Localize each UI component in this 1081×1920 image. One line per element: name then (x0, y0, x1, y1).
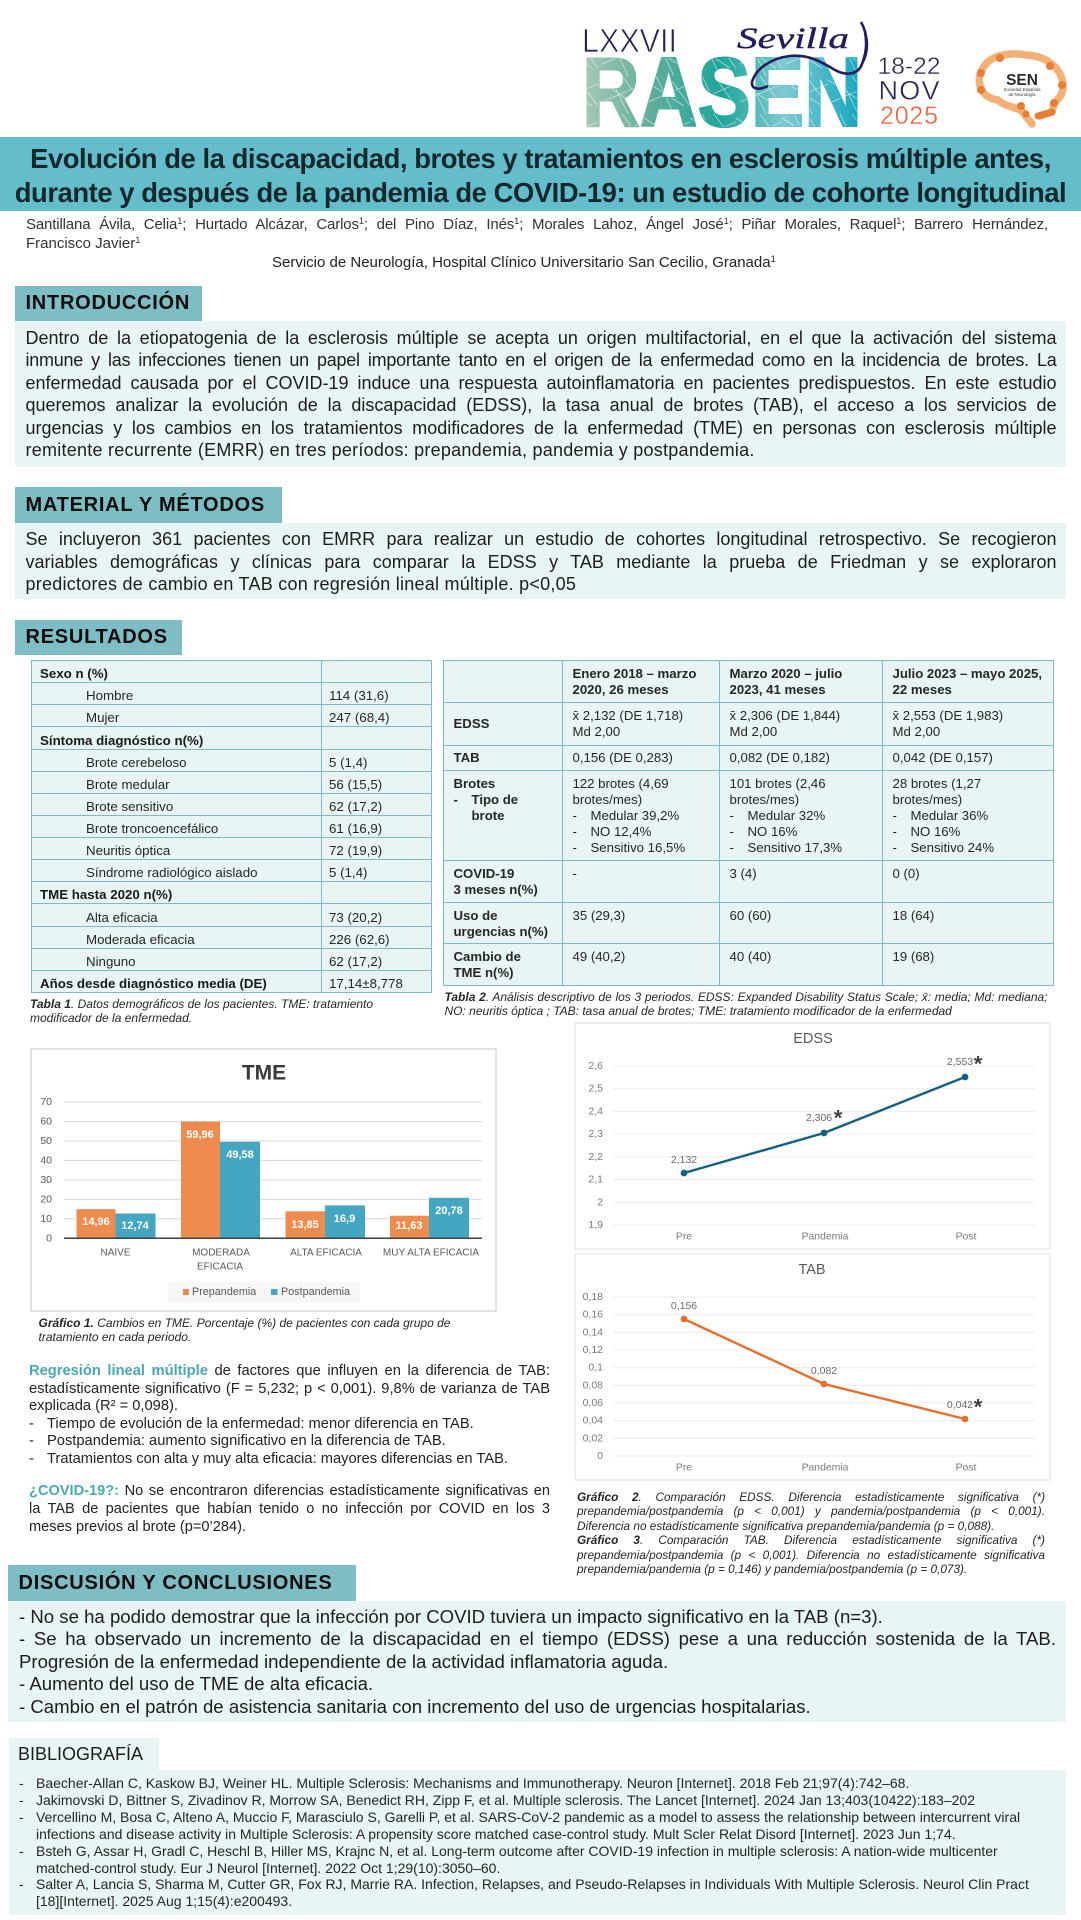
line chart: TAB: Pre (676, 1462, 692, 1474)
text: introducción: remitente recurrente (EMRR) en tres períodos: prepandemia, pandemia y postpandemia. (26, 440, 755, 460)
table 1: datos demográficos: 73 (20,2) (329, 910, 382, 924)
table 2: análisis descriptivo de los 3 periodos: 18 (64) (892, 908, 934, 923)
text: material y métodos: variables demográficas y clínicas para comparar la EDSS y TAB mediante la prueba de Friedman y se exploraron (26, 552, 1056, 572)
text: referencias: Baecher-Allan C, Kaskow BJ, Weiner HL. Multiple Sclerosis: Mechanisms and Immunotherapy. Neuron [Internet]. 2018 Feb 21;97(4):742–68. (36, 1775, 909, 1791)
line chart: EDSS: Pre (676, 1232, 692, 1242)
bar chart: TME: EFICACIA (197, 1262, 243, 1272)
table 1: datos demográficos: Alta eficacia (86, 910, 158, 924)
line chart: EDSS: 2,6 (588, 1060, 603, 1072)
line chart: TAB: 0,156 (671, 1300, 697, 1312)
bar chart: TME: 10 (40, 1213, 52, 1225)
table 2: análisis descriptivo de los 3 periodos (443, 660, 1054, 986)
table 2: análisis descriptivo de los 3 periodos: Cambio de (454, 949, 521, 964)
caption: gráficos 2 y 3: Gráfico 3. Comparación TAB. Diferencia estadísticamente significativa (*) (577, 1533, 1045, 1547)
logo: LXXVII RASEN Sevilla congress: Sevilla (737, 22, 849, 55)
text: referencias: matched-control study. Eur J Neurol [Internet]. 2022 Oct 1;29(10):3050–60. (36, 1860, 500, 1876)
table 1: datos demográficos: Brote sensitivo (86, 799, 173, 814)
table 1: datos demográficos (31, 660, 432, 993)
text: referencias: - (19, 1876, 24, 1892)
line chart: TAB: 0,082 (811, 1365, 837, 1377)
heading: introducción: INTRODUCCIÓN (26, 292, 190, 314)
line chart: EDSS: 2,5 (588, 1083, 603, 1095)
bar chart: TME: 0 (46, 1232, 52, 1244)
table 2: análisis descriptivo de los 3 periodos: Uso de (454, 908, 497, 923)
text: ¿COVID-19? (29, 1483, 550, 1535)
caption: tabla 2: Tabla 2. Análisis descriptivo de los 3 periodos. EDSS: Expanded Disability Status Scale; x̄: media; Md: mediana; (444, 990, 1048, 1004)
bar chart: TME: 13,85 (291, 1219, 319, 1231)
caption: gráfico 1 (38, 1316, 450, 1344)
table 1: datos demográficos: 56 (15,5) (329, 777, 382, 792)
table 2: análisis descriptivo de los 3 periodos: Md 2,00 (572, 724, 620, 739)
table 2: análisis descriptivo de los 3 periodos: NO 16% (910, 824, 960, 839)
text: referencias: infections and disease activity in Multiple Sclerosis: A propensity score matched case-control study. Mult Scler Relat Disord [Internet]. 2023 Jun 1;74. (36, 1826, 956, 1842)
heading: resultados: RESULTADOS (26, 626, 168, 648)
text: regresión lineal múltiple: explicada (R² = 0,098). (29, 1398, 178, 1414)
table 1: datos demográficos: 5 (1,4) (329, 865, 367, 880)
table 2: análisis descriptivo de los 3 periodos: Sensitivo 24% (910, 840, 994, 855)
table 1: datos demográficos: Ninguno (86, 954, 136, 969)
caption: gráficos 2 y 3: Diferencia no estadísticamente significativa prepandemia/pandemia (p = 0,088). (577, 1519, 994, 1533)
table 2: análisis descriptivo de los 3 periodos: 0,156 (DE 0,283) (572, 750, 673, 765)
text: referencias: - (19, 1792, 24, 1808)
text: introducción: enfermedad causada por el COVID-19 induce una respuesta autoinflamatoria en pacientes predispuestos. En este estudio (26, 373, 1056, 393)
line chart: TAB: 0,14 (583, 1326, 603, 1338)
bar chart: TME: 59,96 (186, 1129, 214, 1141)
line chart: EDSS: 2,3 (588, 1128, 603, 1140)
table 2: análisis descriptivo de los 3 periodos: - (572, 866, 577, 881)
table 2: análisis descriptivo de los 3 periodos: 101 brotes (2,46 brotes/mes) (730, 776, 826, 807)
text: ¿COVID-19?: la TAB de pacientes que habían tenido o no infección por COVID en los 3 (29, 1501, 550, 1517)
table 2: análisis descriptivo de los 3 periodos: TME n(%) (454, 965, 514, 980)
caption: gráficos 2 y 3: Gráfico 2. Comparación EDSS. Diferencia estadísticamente significativa (*) (577, 1490, 1045, 1504)
logo: SEN Sociedad Española de Neurología: Sociedad Española (1003, 87, 1041, 92)
table 2: análisis descriptivo de los 3 periodos: x̄ 2,306 (DE 1,844) (730, 708, 840, 723)
table 2: análisis descriptivo de los 3 periodos: Medular 32% (748, 808, 825, 823)
table 2: análisis descriptivo de los 3 periodos: 3 (4) (730, 866, 757, 881)
text: material y métodos: predictores de cambio en TAB con regresión lineal múltiple. p<0,05 (26, 574, 576, 594)
table 2: análisis descriptivo de los 3 periodos: x̄ 2,553 (DE 1,983) (892, 708, 1003, 723)
heading: discusión y conclusiones (8, 1565, 356, 1601)
text: discusión y conclusiones: - Aumento del uso de TME de alta eficacia. (19, 1673, 373, 1694)
table 2: análisis descriptivo de los 3 periodos: EDSS (454, 716, 489, 731)
text: regresión lineal múltiple: - (29, 1433, 34, 1449)
line chart: TAB: TAB (798, 1262, 826, 1278)
table 2: análisis descriptivo de los 3 periodos: 0,042 (DE 0,157) (892, 750, 993, 765)
logo: LXXVII RASEN Sevilla congress: 18-22 (878, 53, 940, 80)
caption: gráficos 2 y 3: prepandemia/pandemia (p = 0,146) y pandemia/postpandemia (p = 0,073). (577, 1562, 967, 1576)
line chart: TAB: 0 (597, 1450, 603, 1462)
text: regresión lineal múltiple: Postpandemia: aumento significativo en la diferencia de TAB. (47, 1433, 446, 1449)
text: regresión lineal múltiple: Tiempo de evolución de la enfermedad: menor diferencia en TAB. (47, 1416, 474, 1432)
table 2: análisis descriptivo de los 3 periodos: 19 (68) (892, 949, 934, 964)
line chart: EDSS: Post (956, 1232, 977, 1242)
text: referencias (19, 1775, 1029, 1909)
line chart: TAB: 0,042 (947, 1399, 973, 1411)
bar chart: TME: 60 (40, 1116, 52, 1128)
title banner: Evolución de la discapacidad, brotes y tratamientos en esclerosis múltiple antes, (30, 143, 1051, 174)
table 1: datos demográficos: Brote troncoencefálico (86, 821, 218, 836)
heading: bibliografía (9, 1738, 159, 1770)
table 2: análisis descriptivo de los 3 periodos: 0,082 (DE 0,182) (730, 750, 830, 765)
table 1: datos demográficos: Años desde diagnóstico media (DE) (40, 976, 267, 991)
table 2: análisis descriptivo de los 3 periodos: 2023, 41 meses (730, 682, 826, 697)
text: regresión lineal múltiple (29, 1363, 550, 1467)
table 2: análisis descriptivo de los 3 periodos: Medular 36% (910, 808, 988, 823)
line chart: EDSS: * (834, 1106, 843, 1130)
logo: SEN Sociedad Española de Neurología: de Neurología (1008, 92, 1036, 97)
panel: discusión y conclusiones (8, 1601, 1066, 1722)
bar chart: TME: 20 (40, 1193, 52, 1205)
text: referencias: Salter A, Lancia S, Sharma M, Cutter GR, Fox RJ, Marrie RA. Infection, Relapses, and Pseudo-Relapses in Individuals With Multiple Sclerosis. Neurol Clin Pract (36, 1876, 1029, 1892)
bar chart: TME: 50 (40, 1135, 52, 1147)
caption: tabla 1: Tabla 1. Datos demográficos de los pacientes. TME: tratamiento modificador de la enfermedad. (30, 997, 373, 1025)
text: referencias: Vercellino M, Bosa C, Alteno A, Muccio F, Marasciulo S, Garelli P, et al. SARS-CoV-2 pandemic as a model to assess the relationship between intercurrent viral (36, 1809, 1020, 1825)
line chart: TAB: 0,18 (583, 1291, 603, 1303)
line chart: EDSS: 1,9 (588, 1219, 603, 1231)
table 1: datos demográficos: 114 (31,6) (329, 688, 389, 703)
authors (26, 215, 1048, 252)
line chart: EDSS: EDSS (793, 1031, 833, 1047)
table 1: datos demográficos: 17,14±8,778 (329, 976, 403, 991)
heading: discusión y conclusiones: DISCUSIÓN Y CONCLUSIONES (18, 1572, 332, 1594)
bar chart: TME: NAIVE (100, 1248, 131, 1258)
heading: material y métodos (15, 487, 282, 523)
caption: gráfico 1: tratamiento en cada periodo. (38, 1330, 191, 1344)
line chart: EDSS: 2,2 (588, 1151, 603, 1163)
bar chart: TME: 11,63 (396, 1220, 422, 1232)
line chart: EDSS: 2 (597, 1196, 603, 1208)
heading: resultados (15, 620, 182, 655)
logo: SEN Sociedad Española de Neurología: SEN (1006, 72, 1038, 89)
table 2: análisis descriptivo de los 3 periodos: Tipo de (472, 792, 518, 807)
line chart: EDSS: * (974, 1052, 983, 1076)
text: regresión lineal múltiple: Tratamientos con alta y muy alta eficacia: mayores diferencias en TAB. (47, 1451, 508, 1467)
bar chart: TME: 30 (40, 1174, 52, 1186)
logo: LXXVII RASEN Sevilla congress: LXXVII (582, 22, 677, 59)
caption: tabla 2: NO: neuritis óptica ; TAB: tasa anual de brotes; TME: tratamiento modificador de la enfermedad (444, 1004, 952, 1018)
text: ¿COVID-19?: meses previos al brote (p=0’284). (29, 1519, 246, 1535)
text: introducción (26, 328, 1057, 460)
table 2: análisis descriptivo de los 3 periodos: Brotes (454, 776, 495, 791)
table 2: análisis descriptivo de los 3 periodos: 35 (29,3) (572, 908, 625, 923)
text: referencias: Bsteh G, Assar H, Gradl C, Heschl B, Hiller MS, Krajnc N, et al. Long-term outcome after COVID-19 infection in multiple sclerosis: A nation-wide multicenter (36, 1843, 998, 1859)
table 2: análisis descriptivo de los 3 periodos: Marzo 2020 – julio (730, 666, 842, 681)
table 2: análisis descriptivo de los 3 periodos: Medular 39,2% (590, 808, 679, 823)
line chart: EDSS: Pandemia (802, 1232, 849, 1242)
panel: material y métodos (15, 523, 1066, 599)
logo: LXXVII RASEN Sevilla congress: NOV (878, 76, 940, 106)
table 2: análisis descriptivo de los 3 periodos: NO 16% (748, 824, 797, 839)
caption: gráficos 2 y 3 (576, 1490, 1045, 1576)
table 2: análisis descriptivo de los 3 periodos: Sensitivo 17,3% (748, 840, 842, 855)
logo: SEN Sociedad Española de Neurología (976, 50, 1067, 128)
bar chart: TME: 12,74 (121, 1220, 150, 1232)
table 1: datos demográficos: 247 (68,4) (329, 710, 390, 725)
bar chart: TME: 40 (40, 1154, 52, 1166)
caption: gráficos 2 y 3: prepandemia/postpandemia (p < 0,001) y pandemia/postpandemia (p < 0,001). (577, 1504, 1045, 1518)
table 2: análisis descriptivo de los 3 periodos: 2020, 26 meses (572, 682, 669, 697)
table 2: análisis descriptivo de los 3 periodos: TAB (454, 750, 480, 765)
text: referencias: [18][Internet]. 2025 Aug 1;15(4):e200493. (36, 1893, 292, 1909)
text: introducción: inmune y las infecciones tienen un papel importante tanto en el origen de la enfermedad como en la incidencia de brotes. La (26, 350, 1056, 370)
table 2: análisis descriptivo de los 3 periodos: Julio 2023 – mayo 2025, (892, 666, 1042, 681)
title banner: durante y después de la pandemia de COVID-19: un estudio de cohorte longitudinal (15, 176, 1066, 208)
line chart: TAB (574, 1254, 1050, 1480)
table 2: análisis descriptivo de los 3 periodos: COVID-19 (454, 866, 514, 881)
text: regresión lineal múltiple: Regresión lineal múltiple de factores que influyen en la diferencia de TAB: (29, 1363, 550, 1379)
bar chart: TME: Prepandemia (192, 1286, 256, 1298)
bar chart: TME: MUY ALTA EFICACIA (383, 1248, 479, 1258)
table 2: análisis descriptivo de los 3 periodos: x̄ 2,132 (DE 1,718) (572, 708, 683, 723)
table 1: datos demográficos: 5 (1,4) (329, 755, 367, 770)
table 1: datos demográficos: TME hasta 2020 n(%) (40, 887, 172, 902)
table 1: datos demográficos: 62 (17,2) (329, 799, 382, 814)
bar chart: TME: ALTA EFICACIA (290, 1248, 362, 1258)
text: discusión y conclusiones: Progresión de la enfermedad independiente de la actividad inflamatoria aguda. (19, 1651, 668, 1672)
table 2: análisis descriptivo de los 3 periodos: Md 2,00 (730, 724, 777, 739)
table 1: datos demográficos: Hombre (86, 688, 133, 703)
text: regresión lineal múltiple: - (29, 1416, 34, 1432)
bar chart: TME: 70 (40, 1096, 52, 1108)
table 2: análisis descriptivo de los 3 periodos: 49 (40,2) (572, 949, 625, 964)
text: material y métodos (26, 529, 1056, 594)
bar chart: TME: 16,9 (334, 1213, 355, 1225)
line chart: TAB: * (974, 1394, 983, 1420)
table 1: datos demográficos: Mujer (86, 710, 119, 725)
text: regresión lineal múltiple: - (29, 1451, 34, 1467)
bar chart: TME: 20,78 (435, 1205, 463, 1217)
table 1: datos demográficos: 62 (17,2) (329, 954, 382, 969)
text: discusión y conclusiones (19, 1606, 1056, 1717)
line chart: TAB: 0,12 (583, 1344, 603, 1356)
line chart: EDSS: 2,1 (588, 1174, 603, 1186)
table 2: análisis descriptivo de los 3 periodos: 3 meses n(%) (454, 882, 538, 897)
table 2: análisis descriptivo de los 3 periodos: Enero 2018 – marzo (572, 666, 696, 681)
table 2: análisis descriptivo de los 3 periodos: 0 (0) (892, 866, 920, 881)
text: introducción: queremos analizar la evolución de la discapacidad (EDSS), la tasa anual de brotes (TAB), el acceso a los servicios de (26, 395, 1056, 415)
caption: gráfico 1: Gráfico 1. Cambios en TME. Porcentaje (%) de pacientes con cada grupo de (38, 1316, 450, 1330)
affiliation: Servicio de Neurología, Hospital Clínico Universitario San Cecilio, Granada1 (272, 253, 776, 270)
text: referencias: - (19, 1809, 24, 1825)
table 1: datos demográficos: 72 (19,9) (329, 843, 382, 858)
table 2: análisis descriptivo de los 3 periodos: 22 meses (892, 682, 952, 697)
caption: gráficos 2 y 3: prepandemia/postpandemia (p < 0,001). Diferencia no estadísticamente significativa (577, 1548, 1045, 1562)
text: discusión y conclusiones: - No se ha podido demostrar que la infección por COVID tuviera un impacto significativo en la TAB (n=3). (19, 1606, 883, 1627)
line chart: TAB: 0,06 (583, 1397, 603, 1409)
table 1: datos demográficos: 226 (62,6) (329, 932, 390, 947)
line chart: TAB: Pandemia (802, 1462, 849, 1474)
bar chart: TME: 49,58 (226, 1149, 254, 1161)
heading: introducción (15, 286, 202, 321)
table 1: datos demográficos: Síntoma diagnóstico n(%) (40, 732, 203, 748)
table 2: análisis descriptivo de los 3 periodos: 60 (60) (730, 908, 771, 923)
text: regresión lineal múltiple: estadísticamente significativo (F = 5,232; p < 0,001). 9,8% de varianza de TAB (29, 1381, 550, 1397)
bar chart: TME: Postpandemia (281, 1286, 350, 1298)
table 2: análisis descriptivo de los 3 periodos: 122 brotes (4,69 brotes/mes) (572, 776, 669, 807)
text: referencias: - (19, 1843, 24, 1859)
line chart: TAB: 0,1 (588, 1362, 603, 1374)
bar chart: TME: MODERADA (192, 1248, 250, 1258)
authors: Santillana Ávila, Celia1; Hurtado Alcázar, Carlos1; del Pino Díaz, Inés1; Morales Lahoz, Ángel José1; Piñar Morales, Raquel1; Barrero Hernández, (26, 215, 1048, 232)
table 1: datos demográficos: 61 (16,9) (329, 821, 382, 836)
table 1: datos demográficos: Neuritis óptica (86, 843, 170, 858)
table 1: datos demográficos: Moderada eficacia (86, 932, 195, 947)
text: material y métodos: Se incluyeron 361 pacientes con EMRR para realizar un estudio de cohortes longitudinal retrospectivo. Se recogieron (26, 529, 1056, 549)
table 1: datos demográficos: Brote medular (86, 777, 170, 792)
table 2: análisis descriptivo de los 3 periodos: urgencias n(%) (454, 924, 548, 939)
heading: bibliografía: BIBLIOGRAFÍA (18, 1744, 143, 1764)
caption: tabla 2 (444, 990, 1048, 1018)
table 2: análisis descriptivo de los 3 periodos: Sensitivo 16,5% (590, 840, 685, 855)
text: introducción: urgencias y los cambios en los tratamientos modificadores de la enfermedad (TME) en personas con esclerosis múltiple (26, 418, 1056, 438)
line chart: TAB: 0,04 (583, 1415, 603, 1427)
line chart: EDSS: 2,132 (671, 1154, 697, 1166)
table 1: datos demográficos: Sexo n (%) (40, 666, 108, 681)
table 1: datos demográficos: Brote cerebeloso (86, 755, 187, 770)
bar chart: TME: 14,96 (82, 1216, 110, 1228)
text: referencias: - (19, 1775, 24, 1791)
line chart: TAB: Post (956, 1462, 977, 1474)
line chart: EDSS: 2,306 (806, 1112, 832, 1124)
heading: material y métodos: MATERIAL Y MÉTODOS (26, 494, 265, 516)
text: discusión y conclusiones: - Se ha observado un incremento de la discapacidad en el tiempo (EDSS) pese a una reducción sostenida de la TAB. (19, 1628, 1056, 1649)
panel: bibliografía (9, 1770, 1066, 1915)
table 1: datos demográficos: Síndrome radiológico aislado (86, 865, 257, 880)
text: discusión y conclusiones: - Cambio en el patrón de asistencia sanitaria con incremento del uso de urgencias hospitalarias. (19, 1696, 811, 1717)
text: referencias: Jakimovski D, Bittner S, Zivadinov R, Morrow SA, Benedict RH, Zipp F, et al. Multiple sclerosis. The Lancet [Internet]. 2024 Jan 13;403(10422):183–202 (36, 1792, 975, 1808)
line chart: TAB: 0,08 (583, 1379, 603, 1391)
table 2: análisis descriptivo de los 3 periodos: 28 brotes (1,27 brotes/mes) (892, 776, 981, 807)
logo: LXXVII RASEN Sevilla congress: 2025 (880, 102, 938, 130)
line chart: EDSS: 2,553 (947, 1056, 973, 1068)
table 2: análisis descriptivo de los 3 periodos: Md 2,00 (892, 724, 940, 739)
table 2: análisis descriptivo de los 3 periodos: 40 (40) (730, 949, 771, 964)
bar chart: TME (30, 1048, 497, 1312)
table 2: análisis descriptivo de los 3 periodos: brote (472, 808, 504, 823)
line chart: EDSS (574, 1022, 1050, 1250)
line chart: TAB: 0,16 (583, 1309, 603, 1321)
line chart: TAB: 0,02 (583, 1432, 603, 1444)
title banner (0, 137, 1081, 211)
line chart: EDSS: 2,4 (588, 1105, 603, 1117)
bar chart: TME: TME (242, 1062, 286, 1084)
text: ¿COVID-19?: ¿COVID-19?: No se encontraron diferencias estadísticamente significativas en (29, 1483, 550, 1499)
text: introducción: Dentro de la etiopatogenia de la esclerosis múltiple se acepta un origen multifactorial, en el que la activación del sistema (26, 328, 1056, 348)
table 2: análisis descriptivo de los 3 periodos: NO 12,4% (590, 824, 651, 839)
authors: Francisco Javier1 (26, 234, 140, 252)
panel: introducción (15, 321, 1066, 467)
